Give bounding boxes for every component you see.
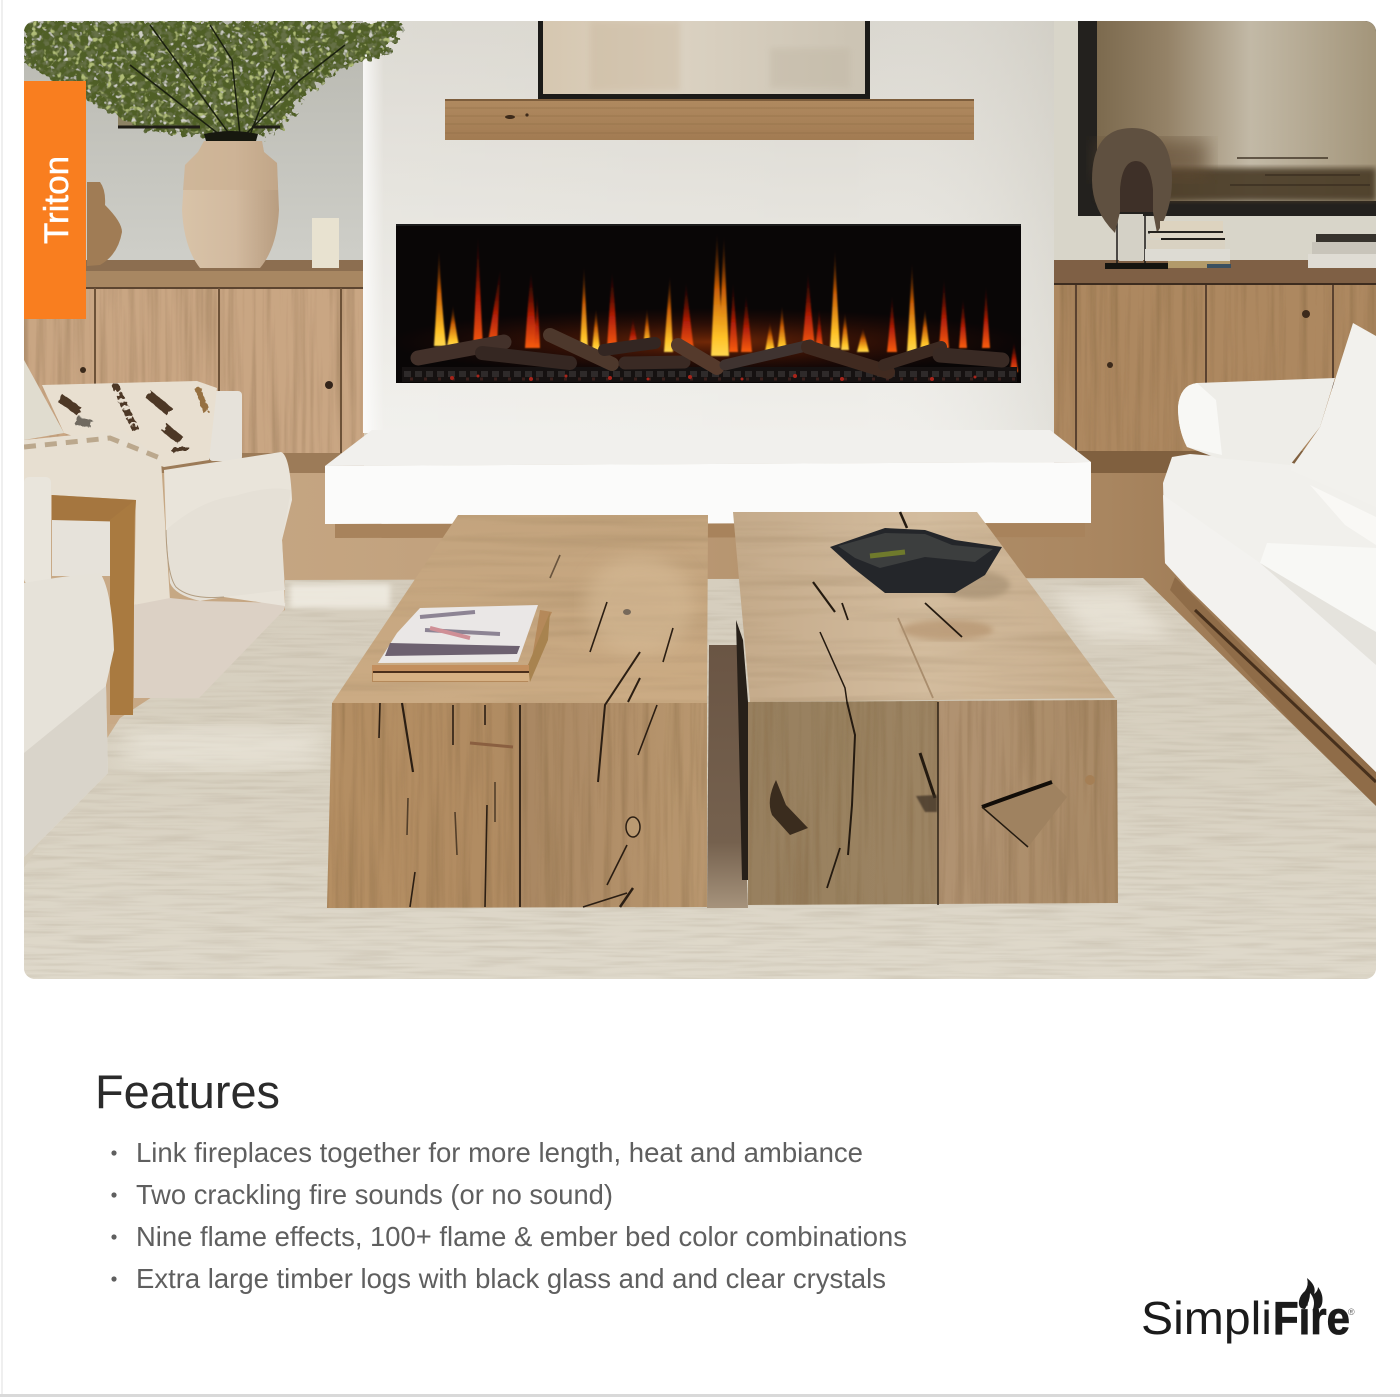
bowl shadow: [940, 571, 1010, 599]
right wall artwork: [1078, 21, 1376, 216]
chair arm top: [164, 452, 292, 606]
left cabinet: [24, 260, 364, 475]
electric fireplace: [388, 224, 1028, 383]
fireplace wall: [363, 21, 1054, 433]
logo word: Fire: Fire: [1273, 1292, 1350, 1344]
branches: [130, 25, 345, 135]
cracks: [379, 555, 673, 907]
right wall: [1054, 21, 1376, 266]
art behind plant: [118, 116, 280, 126]
dark bowl: [830, 528, 1002, 593]
feature list: [111, 1137, 907, 1294]
potted plant: [24, 21, 405, 268]
sculpture and books: [1092, 128, 1376, 269]
red flames: [473, 235, 1018, 372]
front panel: [1163, 495, 1376, 772]
flame glow: [432, 313, 982, 367]
pillow: [1290, 323, 1376, 507]
sofa underbody: [1163, 454, 1376, 772]
left wall: [24, 21, 364, 266]
wood mantel: [445, 99, 974, 140]
yellow flames: [434, 232, 930, 356]
left post: [24, 477, 51, 584]
knot: [626, 817, 640, 837]
table front: [748, 700, 1118, 905]
cracks and knots: [813, 512, 962, 905]
table front: [327, 703, 707, 908]
rug light patches: [125, 728, 320, 768]
white raised hearth: [325, 430, 1091, 538]
chair base: [134, 598, 286, 698]
chair arm post: [209, 391, 242, 461]
bullet 4: Extra large timber logs with black glass and and clear crystals: [136, 1263, 886, 1294]
flame icon: [1299, 1278, 1322, 1309]
back cushion: [24, 360, 64, 440]
foliage: [24, 21, 405, 136]
logo word: Simpli: Simpli: [1141, 1292, 1272, 1344]
knot left: [770, 780, 808, 835]
table top: [332, 515, 708, 703]
magazines: [372, 605, 552, 682]
orange product tab: [24, 81, 86, 319]
second seat cushion: [1260, 543, 1376, 632]
SimpliFire logo: [1141, 1278, 1355, 1344]
table top: [733, 512, 1115, 702]
registered mark: ®: [1348, 1307, 1355, 1317]
left armchairs with throw: [24, 360, 292, 857]
right coffee table: [733, 512, 1118, 905]
logs: [418, 335, 1002, 372]
rug: [24, 578, 1376, 979]
wood floor: [24, 473, 1376, 813]
bullet 3: Nine flame effects, 100+ flame & ember bed color combinations: [136, 1221, 907, 1252]
chair arm front: [166, 526, 285, 601]
side table: [52, 495, 136, 715]
right cabinet: [1054, 260, 1376, 475]
bullet 2: Two crackling fire sounds (or no sound): [136, 1179, 613, 1210]
foreground chair: [24, 576, 114, 802]
gap between coffee tables: [707, 620, 748, 908]
frame behind plant: [118, 126, 280, 128]
sofa base rail: [1170, 577, 1302, 728]
tab label: Triton: [38, 156, 76, 244]
ceramic vase: [182, 141, 279, 268]
right white sofa: [1163, 323, 1376, 805]
heading: Features: Features: [95, 1065, 280, 1118]
panel: room photo: [24, 15, 1376, 979]
left coffee table: [327, 515, 708, 908]
ember bed: [402, 367, 1017, 382]
bullet 1: Link fireplaces together for more length, heat and ambiance: [136, 1137, 863, 1168]
throw blanket: [24, 381, 217, 605]
candle: [312, 218, 339, 268]
framed art above mantel: [538, 15, 870, 100]
knot right: [982, 782, 1067, 847]
arm cushion: [1178, 378, 1335, 465]
small jug: [87, 182, 122, 266]
